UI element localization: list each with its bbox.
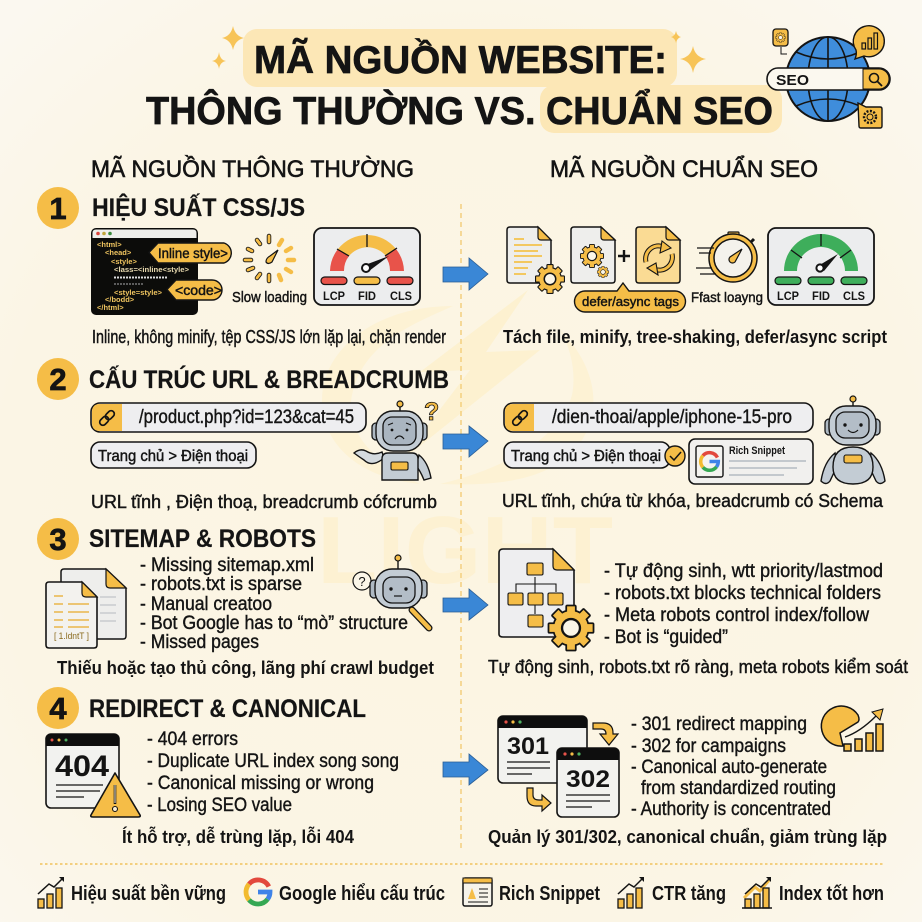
icon: stopwatch — [696, 232, 757, 282]
title highlight: line 1 — [243, 29, 677, 87]
caption 1 left: Inline, không minify, tệp CSS/JS lớn lặp lại, chặn render — [92, 326, 446, 347]
benefit: Google understands — [246, 880, 445, 905]
icon: sitemap documents: [ 1.ldntT ] — [54, 631, 89, 641]
gauge: red: CLS — [390, 289, 412, 303]
search bar: SEO — [776, 72, 809, 89]
watermark: light logo — [317, 290, 613, 604]
list 4 right: - 302 for campaigns — [631, 736, 786, 757]
icon: sync file — [636, 227, 680, 283]
section 3 number: 3 — [49, 522, 67, 557]
list 4 left: - Losing SEO value — [147, 795, 292, 816]
list 4 left — [147, 729, 399, 816]
section 4 heading: REDIRECT & CANONICAL — [89, 695, 366, 723]
column heading: standard code: MÃ NGUỒN THÔNG THƯỜNG — [91, 155, 414, 183]
icon: sitemap tree document — [499, 549, 594, 651]
title highlight: line 2 — [540, 85, 782, 133]
URL bar: dynamic: /product.php?id=123&cat=45 — [139, 407, 354, 428]
icon: 404 window — [46, 734, 140, 817]
arrow 4 — [443, 754, 488, 785]
code window: <style> — [111, 257, 137, 266]
list 4 right — [631, 714, 836, 820]
icon: 301 and 302 windows — [498, 716, 619, 817]
list 4 right: from standardized routing — [641, 778, 836, 799]
callout: code: <code> — [175, 283, 222, 298]
gauge: green: CLS — [843, 289, 865, 303]
section 4 number — [37, 687, 79, 729]
warning triangle — [91, 773, 140, 817]
title line 2: THÔNG THƯỜNG VS. CHUẨN SEO — [146, 88, 773, 133]
sparkles — [212, 26, 706, 73]
gauge: green: LCP — [777, 289, 799, 303]
icon: confused robot — [354, 401, 431, 480]
arrow 2 — [443, 426, 488, 457]
arrow: 302 to 301 — [527, 788, 551, 811]
icon: robot with magnifier — [353, 555, 429, 628]
section 1 number — [37, 187, 79, 229]
center divider — [460, 204, 462, 848]
list 3 right: - Tự động sinh, wtt priority/lastmod — [604, 561, 883, 582]
list 4 right: - Authority is concentrated — [631, 799, 831, 820]
caption 4 right: Quản lý 301/302, canonical chuẩn, giảm trùng lặp — [488, 826, 887, 847]
callout: code — [167, 280, 222, 300]
code window — [91, 228, 231, 315]
caption 4 left: Ít hỗ trợ, dễ trùng lặp, lỗi 404 — [122, 826, 355, 847]
icon: slow loading spinner — [245, 236, 294, 281]
gear bubble bottom — [858, 103, 882, 128]
caption 2 right: URL tĩnh, chứa từ khóa, breadcrumb có Schema — [502, 490, 884, 511]
section 2 heading: CẤU TRÚC URL & BREADCRUMB — [89, 364, 449, 394]
section 1 number: 1 — [49, 191, 67, 226]
icon: split file with gear — [507, 227, 565, 294]
footer divider — [40, 863, 884, 865]
benefit: CTR increase — [618, 877, 726, 908]
callout: defer/async tags — [574, 283, 686, 312]
list 3 right: - Bot is “guided” — [604, 627, 728, 648]
label: fast loading: Ffast loayng — [691, 289, 763, 305]
list 4 left: - Duplicate URL index song song — [147, 751, 399, 772]
title line 1: MÃ NGUỒN WEBSITE: — [254, 38, 667, 82]
gauge: green — [768, 228, 874, 305]
gauge: green: FID — [812, 289, 830, 303]
icon: pie and growth chart — [821, 706, 883, 751]
icon: robot with magnifier: ? — [358, 574, 366, 589]
list 4 left: - 404 errors — [147, 729, 238, 750]
section 2 number: 2 — [49, 362, 67, 397]
code window: </bodd> — [105, 295, 135, 304]
list 4 right: - 301 redirect mapping — [631, 714, 807, 735]
list 3 left — [140, 555, 408, 653]
gauge: red — [314, 228, 420, 305]
benefit: better index: Index tốt hơn — [779, 883, 884, 905]
arrow 1 — [443, 258, 488, 290]
caption 2 left: URL tĩnh , Điện thoạ, breadcrumb cófcrumb — [91, 491, 437, 512]
code window: <head> — [105, 248, 132, 257]
code window: <style=style> — [114, 288, 163, 297]
rich snippet card — [689, 439, 813, 484]
benefit: rich snippet: Rich Snippet — [499, 883, 600, 905]
callout: defer/async tags: defer/async tags — [582, 294, 680, 309]
icon: SEO globe — [767, 26, 890, 128]
code window: </html> — [97, 303, 124, 312]
chart bubble — [853, 26, 884, 59]
icon: 404 window: 404 — [55, 750, 109, 783]
list 3 left: - Manual creatoo — [140, 594, 272, 615]
label: slow loading: Slow loading — [232, 290, 307, 306]
window 302: 302 — [566, 766, 610, 793]
list 4 left: - Canonical missing or wrong — [147, 773, 374, 794]
question mark: ? — [424, 398, 439, 426]
list 3 left: - Missing sitemap.xml — [140, 555, 314, 576]
arrow: 301 to 302 — [593, 723, 618, 745]
section 3 number — [37, 518, 79, 560]
gauge: red: LCP — [323, 289, 345, 303]
section 2 number — [37, 358, 79, 400]
icon: sitemap documents — [46, 569, 126, 648]
benefit: Google understands: Google hiểu cấu trúc — [279, 883, 445, 905]
arrow 3 — [443, 589, 488, 620]
breadcrumb: plain — [91, 442, 256, 468]
list 3 right — [604, 561, 883, 648]
section 4 number: 4 — [49, 691, 67, 726]
icon: happy robot — [821, 396, 885, 484]
benefit: CTR increase: CTR tăng — [652, 883, 726, 905]
callout: inline style: Inline style> — [158, 246, 228, 261]
icon: gears file — [571, 227, 615, 283]
benefit: sustained performance — [38, 877, 226, 908]
breadcrumb: plain: Trang chủ > Điện thoại — [98, 448, 248, 465]
URL bar: clean: /dien-thoai/apple/iphone-15-pro — [552, 407, 792, 428]
URL bar: clean — [504, 403, 813, 432]
list 3 right: - robots.txt blocks technical folders — [604, 583, 881, 604]
breadcrumb: schema — [504, 442, 685, 468]
watermark: light logo: LIGHT — [317, 497, 613, 604]
code window: <lass=<inline<style> — [114, 265, 190, 274]
list 3 left: - robots.txt is sparse — [140, 574, 302, 595]
footer benefits — [38, 877, 884, 908]
rich snippet card: Rich Snippet — [729, 445, 785, 457]
gauge: red: FID — [358, 289, 376, 303]
plus sign — [618, 250, 630, 262]
list 3 left: - Missed pages — [140, 632, 259, 653]
benefit: better index — [742, 877, 884, 908]
code window: <html> — [97, 240, 122, 249]
window 301: 301 — [507, 733, 549, 760]
benefit: sustained performance: Hiệu suất bền vững — [71, 883, 226, 905]
benefit: rich snippet — [463, 878, 600, 906]
title — [146, 29, 782, 133]
callout: inline style — [149, 243, 231, 263]
list 3 right: - Meta robots control index/follow — [604, 605, 869, 626]
breadcrumb: schema: Trang chủ > Điện thoại — [511, 448, 661, 465]
caption 3 left: Thiếu hoặc tạo thủ công, lãng phí crawl budget — [57, 657, 434, 678]
section 1 heading: HIỆU SUẤT CSS/JS — [92, 192, 305, 222]
URL bar: dynamic — [91, 403, 366, 432]
gear tag top — [773, 29, 788, 54]
list 3 left: - Bot Google has to “mò” structure — [140, 613, 408, 634]
column heading: SEO code: MÃ NGUỒN CHUẨN SEO — [550, 155, 818, 183]
list 4 right: - Canonical auto-generate — [631, 757, 827, 778]
section 3 heading: SITEMAP & ROBOTS — [89, 525, 316, 553]
caption 1 right: Tách file, minify, tree-shaking, defer/async script — [503, 326, 887, 347]
